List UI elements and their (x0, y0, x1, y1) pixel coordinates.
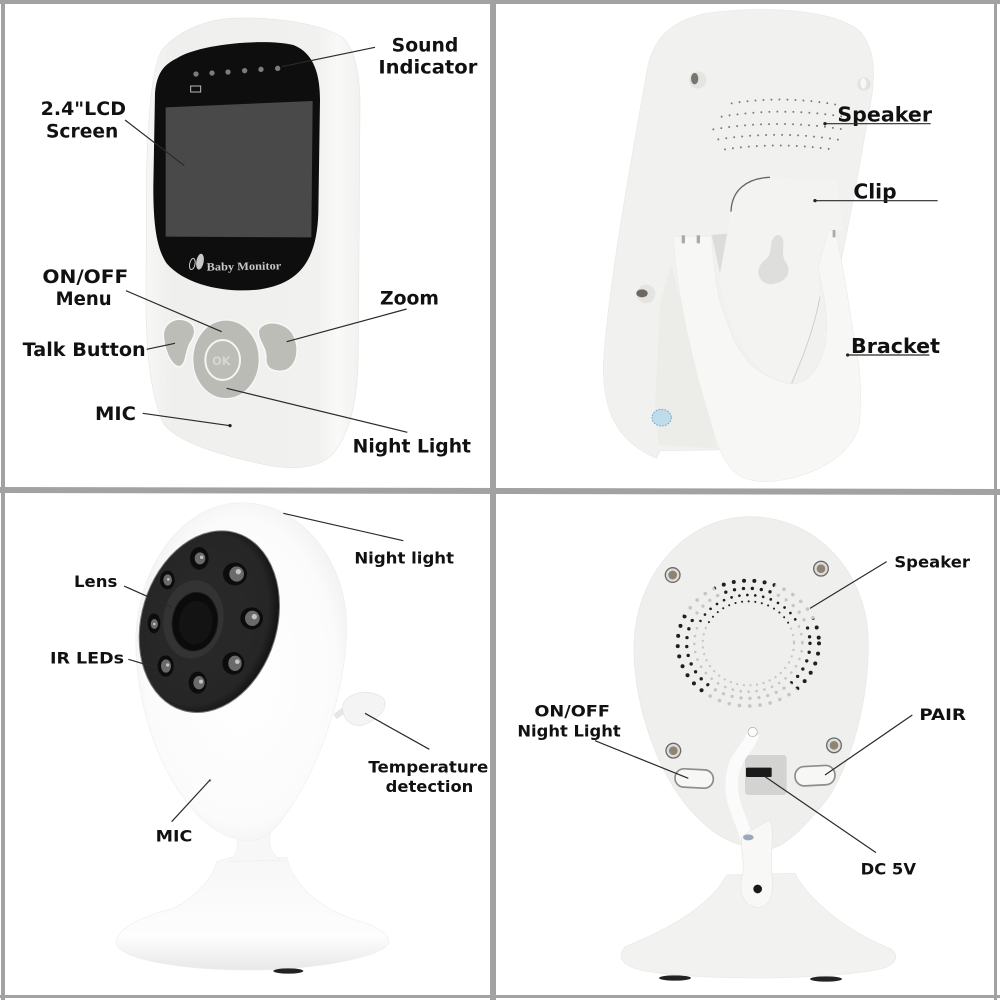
label: Lens: Lens (74, 572, 117, 591)
label: Clip: Clip (853, 179, 897, 203)
temperature sensor (335, 692, 385, 726)
label: IR LEDs (50, 648, 157, 668)
stand arm (741, 820, 773, 907)
black face (118, 513, 301, 730)
label: PAIR: PAIR (919, 705, 966, 724)
label: MIC (95, 404, 230, 426)
label: ON/OFF Menu: ON/OFF (42, 267, 128, 288)
label: LCD Screen: 2.4"LCD (41, 99, 126, 120)
brand text: Baby Monitor (207, 260, 281, 274)
camera back shell (634, 517, 868, 849)
stand pivot hole (753, 885, 762, 893)
label: PAIR (825, 705, 966, 775)
label: ON/OFF Menu: Menu (56, 289, 112, 310)
label: Speaker: Speaker (837, 103, 932, 127)
sound indicator LEDs (193, 66, 280, 77)
label: Temperature detection (365, 713, 488, 796)
camera neck (230, 833, 280, 862)
label: ON/OFF Night Light: ON/OFF (534, 702, 610, 721)
label: Talk Button: Talk Button (23, 340, 146, 361)
panel: monitor front view (23, 18, 478, 468)
clip (720, 177, 843, 385)
label: Lens (74, 572, 172, 607)
label: Temperature detection: detection (386, 777, 473, 796)
label: MIC: MIC (156, 827, 192, 846)
label: LCD Screen (41, 99, 184, 166)
OK label: OK (212, 354, 232, 368)
base (621, 873, 896, 978)
label: Zoom (287, 288, 439, 342)
label: ON/OFF Menu (42, 267, 222, 332)
mic hole (209, 779, 211, 782)
bracket hinge teeth (682, 230, 835, 243)
label: Speaker (810, 552, 970, 608)
monitor back body (603, 10, 874, 458)
label: Bracket: Bracket (851, 334, 940, 358)
LCD screen (166, 101, 313, 237)
label: Night Light: Night Light (353, 437, 471, 458)
bracket (673, 230, 861, 482)
monitor body (146, 18, 360, 468)
label: Sound Indicator: Sound (392, 35, 458, 56)
left button (675, 768, 714, 789)
zoom button (258, 323, 297, 371)
label: Night light (283, 513, 454, 567)
arm shadow behind bracket (712, 233, 730, 273)
OK button (205, 340, 240, 380)
IR LEDs (148, 547, 263, 694)
battery recess (655, 263, 717, 448)
label: Sound Indicator: Indicator (378, 58, 478, 79)
brand logo (189, 253, 281, 274)
wire (732, 733, 753, 840)
camera base (116, 857, 389, 974)
mic hole (228, 424, 232, 427)
label: MIC (156, 780, 210, 846)
label: DC 5V (765, 777, 916, 879)
label: ON/OFF Night Light (517, 702, 688, 778)
black screen bezel (153, 42, 320, 290)
screws (636, 71, 871, 303)
label: LCD Screen: Screen (46, 121, 118, 142)
label: MIC: MIC (95, 404, 136, 425)
label: Night light: Night light (354, 548, 454, 567)
label: Night Light (227, 388, 471, 458)
base feet (659, 975, 842, 982)
lens (158, 576, 229, 662)
speaker holes, dark inner rings (699, 594, 797, 624)
keyhole (758, 235, 788, 284)
label: DC 5V: DC 5V (861, 860, 916, 879)
clip edge (731, 177, 770, 212)
panel: camera back view (517, 517, 970, 982)
camera egg body (136, 503, 347, 840)
panel: monitor back view (603, 10, 940, 482)
talk button (163, 319, 195, 367)
inner bracket shadow (792, 297, 826, 385)
port recess (745, 755, 787, 795)
label: IR LEDs: IR LEDs (50, 648, 124, 667)
label: Zoom: Zoom (380, 288, 439, 309)
wire grommet (748, 727, 757, 737)
stand blue dot (743, 834, 754, 840)
label: Temperature detection: Temperature (368, 757, 488, 776)
battery icon (191, 86, 201, 92)
screws (665, 561, 841, 758)
base foot (273, 968, 303, 974)
right button (795, 765, 835, 786)
blue sticker (652, 409, 671, 426)
label: Clip (813, 179, 938, 203)
speaker grille dots (713, 100, 847, 149)
USB port (746, 768, 772, 777)
label: ON/OFF Night Light: Night Light (517, 722, 621, 741)
speaker holes, dark outer rings (678, 581, 819, 706)
label: Sound Indicator (282, 35, 478, 79)
panel: camera front view (50, 503, 488, 974)
speaker holes, light rings (678, 581, 819, 706)
directional pad (193, 320, 259, 399)
label: Speaker: Speaker (894, 552, 970, 571)
